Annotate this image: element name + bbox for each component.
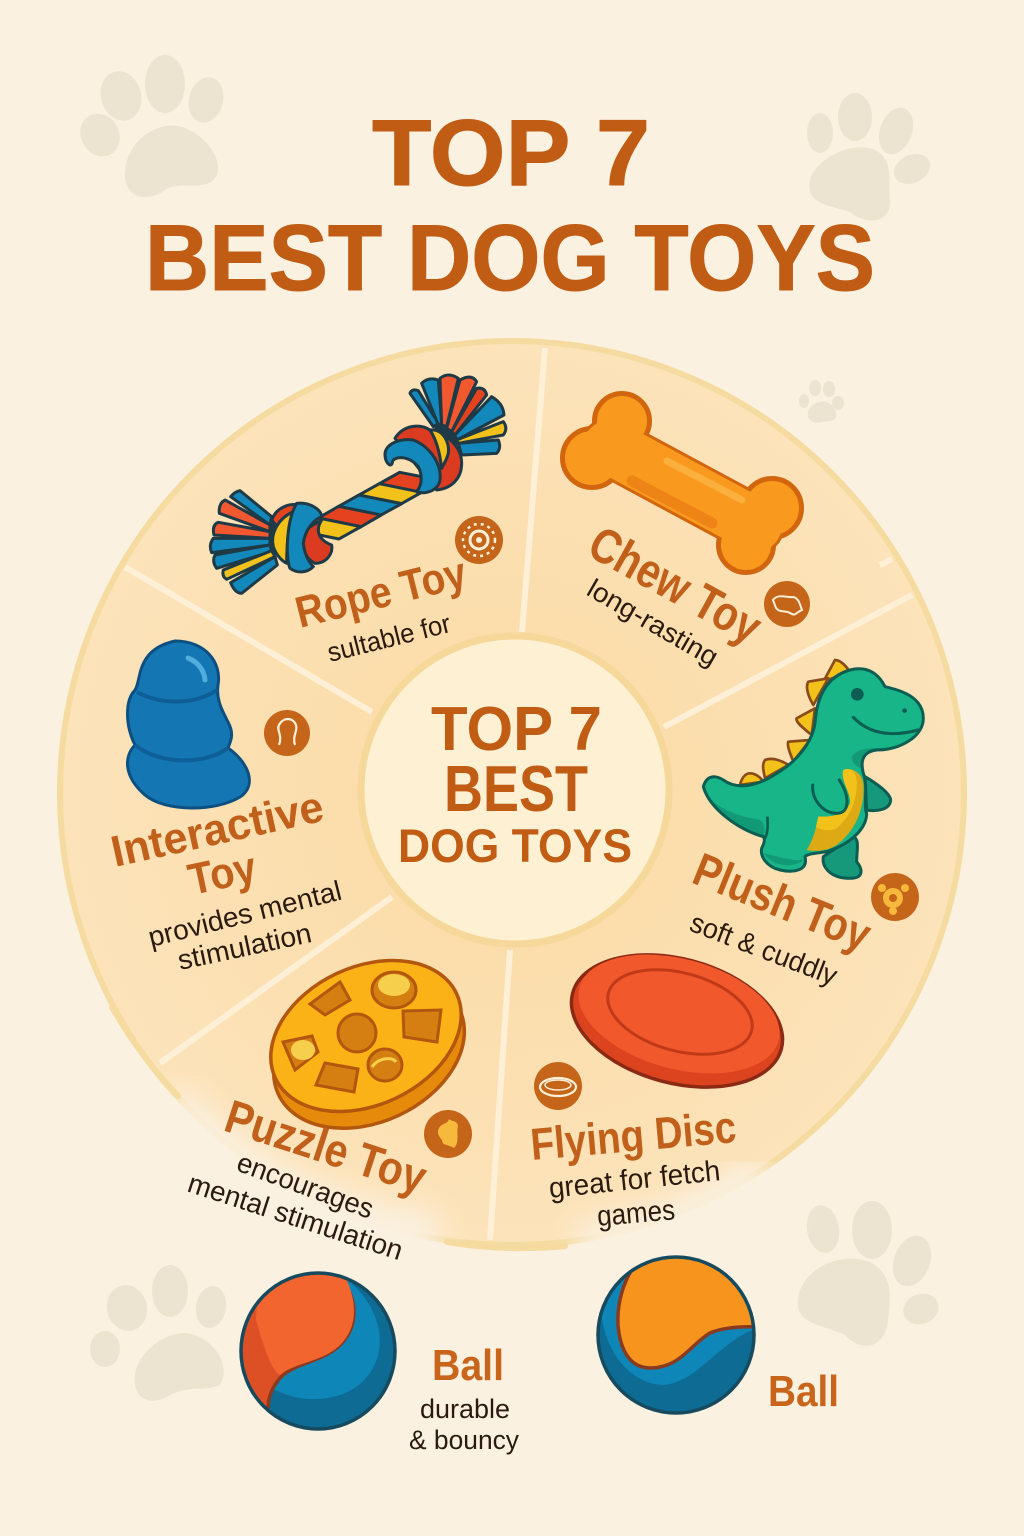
label: interactive toy: Interactive [107,782,328,877]
toy: ball one [239,1271,397,1431]
label: flying disc [528,1101,738,1233]
toy: bone [563,394,801,572]
paw print: top right [807,93,935,221]
toy: puzzle [246,931,489,1158]
label: interactive toy: Toy [184,843,261,905]
icon: interactive toy badge [264,710,310,756]
label: puzzle toy: Puzzle Toy [219,1089,433,1204]
label: flying disc: great for fetch [547,1155,722,1205]
title: TOP 7 [372,100,650,205]
toy: ball two [595,1250,760,1420]
center hub: BEST [444,752,588,825]
wheel [60,341,964,1262]
center hub: DOG TOYS [398,819,632,872]
label: ball two: Ball [768,1367,839,1416]
label: plush toy: soft & cuddly [686,907,842,991]
label: flying disc: games [596,1194,676,1233]
icon: plush toy badge [871,873,919,921]
label: rope toy: Rope Toy [291,548,472,638]
label: interactive toy: provides mental [145,875,345,953]
label: puzzle toy: mental stimulation [184,1167,407,1266]
label: chew toy: long-rasting [582,573,723,672]
paw print: top left [73,55,228,197]
center hub: TOP 7 [431,695,602,764]
paw print: bottom right [798,1201,943,1346]
label: chew toy: Chew Toy [580,516,770,655]
toy: flying disc [557,933,797,1109]
icon: puzzle toy badge [424,1110,472,1158]
label: rope toy [291,548,472,668]
label: ball one: durable [420,1394,510,1424]
label: ball one [409,1341,519,1455]
toy: rope [210,375,506,593]
icon: rope toy badge [455,516,503,564]
toy: plush dinosaur [703,660,923,878]
label: flying disc: Flying Disc [528,1101,738,1170]
label: plush toy: Plush Toy [686,842,879,961]
title: BEST DOG TOYS [145,205,875,310]
label: interactive toy: stimulation [175,917,314,976]
paw print: bottom left [90,1265,229,1401]
icon: flying disc badge [534,1062,582,1110]
label: puzzle toy: encourages [233,1147,378,1225]
icon: chew toy badge [764,581,810,627]
label: ball one: Ball [432,1341,504,1390]
label: rope toy: sultable for [324,608,454,668]
title [145,100,875,310]
center hub [361,636,669,944]
label: interactive toy [107,782,345,976]
toy: interactive blue toy [127,641,249,808]
label: puzzle toy [184,1089,433,1266]
label: ball one: & bouncy [409,1425,519,1455]
paw print: small [799,380,844,423]
